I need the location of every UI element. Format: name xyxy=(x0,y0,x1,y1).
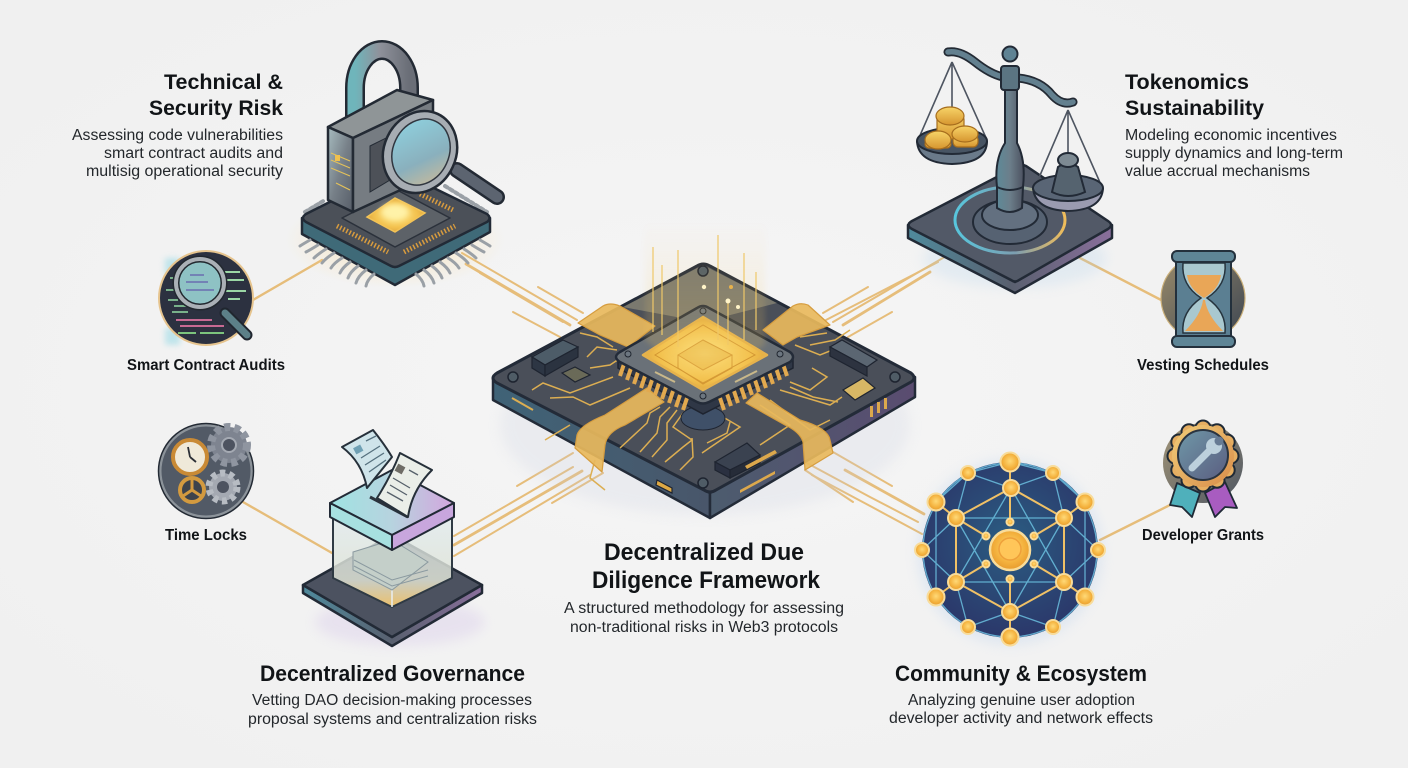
back ballot paper xyxy=(342,430,432,517)
code halo circle xyxy=(159,251,253,345)
caps xyxy=(1172,251,1235,347)
translucent back quadrant xyxy=(623,265,777,322)
central chip xyxy=(616,306,793,430)
magnifier lens xyxy=(381,109,461,195)
lower gear xyxy=(209,473,237,501)
heading: Technical & Security Risk: Security Risk xyxy=(149,96,283,120)
heading: Technical & Security Risk xyxy=(72,70,283,180)
sand xyxy=(1187,275,1221,298)
glowing ring xyxy=(955,187,1065,253)
icon: balance scale on platform xyxy=(908,46,1112,293)
heading: Tokenomics Sustainability: Sustainability xyxy=(1125,96,1264,120)
base top xyxy=(303,535,482,637)
chip pins xyxy=(300,186,490,286)
heading: Decentralized Governance: Decentralized Governance xyxy=(260,661,525,686)
heading: Decentralized Due Diligence Framework: Decentralized Due xyxy=(604,539,804,566)
heading: Technical & Security Risk: Technical & xyxy=(164,70,283,94)
icon: developer grants badge xyxy=(1163,420,1243,517)
heading: Community & Ecosystem: Community & Ecosystem xyxy=(895,661,1147,686)
grey gear xyxy=(211,427,247,463)
pivot block and knob xyxy=(1001,66,1019,90)
column xyxy=(996,75,1024,212)
rosette disc xyxy=(1172,425,1234,487)
heading: Tokenomics Sustainability: supply dynamics and long-term xyxy=(1125,145,1343,162)
board sides xyxy=(493,377,915,518)
network nodes xyxy=(915,452,1105,646)
inner die xyxy=(342,190,450,247)
front ballot paper xyxy=(377,453,432,517)
chip glow xyxy=(285,192,505,288)
label: Developer Grants: Developer Grants xyxy=(1142,527,1264,544)
ballot slot xyxy=(370,497,408,517)
board top xyxy=(493,264,914,492)
heading: Decentralized Due Diligence Framework xyxy=(564,539,844,636)
icon: hourglass xyxy=(1161,251,1245,347)
heading: Decentralized Due Diligence Framework: non-traditional risks in Web3 protocols xyxy=(570,619,838,636)
ribbons xyxy=(1170,483,1200,517)
right pan with weight xyxy=(1033,110,1103,211)
stepped plinth xyxy=(973,200,1047,244)
base top xyxy=(908,165,1111,282)
gold connector tabs xyxy=(575,304,833,472)
vertical light beams xyxy=(645,222,765,382)
central circuit board xyxy=(493,222,915,518)
board glow xyxy=(500,335,910,515)
halo circle xyxy=(1161,256,1245,340)
base glow xyxy=(923,228,1107,288)
heading: Decentralized Governance: proposal systems and centralization risks xyxy=(248,711,537,728)
chip pins xyxy=(620,364,787,410)
heading: Tokenomics Sustainability: Tokenomics xyxy=(1125,70,1249,94)
heading: Community & Ecosystem: Analyzing genuine user adoption xyxy=(908,692,1135,709)
magnifier handle xyxy=(225,313,247,335)
globe glow xyxy=(917,459,1103,645)
chip top xyxy=(616,306,793,404)
board traces xyxy=(512,330,850,490)
heading: Decentralized Governance: Vetting DAO decision-making processes xyxy=(252,692,532,709)
icon: smart contract audit magnifier xyxy=(159,251,253,345)
paper stack in box xyxy=(353,540,428,590)
transparent box xyxy=(333,517,452,607)
label: Smart Contract Audits: Smart Contract Audits xyxy=(127,357,285,374)
clock xyxy=(173,440,207,474)
label: Vesting Schedules: Vesting Schedules xyxy=(1137,357,1269,374)
heading: Technical & Security Risk: smart contract audits and xyxy=(104,145,283,162)
code lines xyxy=(166,272,246,333)
frame panel xyxy=(1176,258,1231,340)
coins xyxy=(925,107,978,149)
icon: network globe xyxy=(915,452,1105,646)
chip body xyxy=(681,406,725,430)
beam xyxy=(948,52,1073,103)
board screw holes xyxy=(508,266,900,488)
base side xyxy=(303,585,482,646)
magnifier handle xyxy=(457,170,497,197)
connector lines xyxy=(243,253,1170,556)
gold links xyxy=(936,462,1085,637)
label: Time Locks: Time Locks xyxy=(165,527,247,544)
chip gold core xyxy=(643,317,767,390)
rosette bumps xyxy=(1168,420,1238,492)
chip side xyxy=(302,218,490,285)
lock shackle xyxy=(355,50,409,128)
gold gear xyxy=(180,478,204,502)
icon: ballot box xyxy=(303,430,485,646)
die gold pins xyxy=(337,194,455,252)
heading: Technical & Security Risk: multisig operational security xyxy=(86,163,283,180)
halo circle xyxy=(1163,423,1243,503)
blue mesh xyxy=(922,462,1098,637)
lock body xyxy=(328,90,433,212)
hub node xyxy=(990,530,1030,570)
base side xyxy=(908,225,1112,293)
heading: Decentralized Due Diligence Framework: A structured methodology for assessing xyxy=(564,600,844,617)
chip top xyxy=(303,170,490,267)
globe xyxy=(922,462,1098,638)
lock circuit lines xyxy=(331,153,350,190)
heading: Decentralized Governance xyxy=(248,661,537,728)
heading: Community & Ecosystem: developer activity and network effects xyxy=(889,710,1153,727)
magnifier ring xyxy=(370,99,470,205)
heading: Community & Ecosystem xyxy=(889,661,1153,727)
dial circle xyxy=(160,425,252,517)
chip corner screws xyxy=(625,308,783,399)
glass xyxy=(1183,263,1225,333)
heading: Tokenomics Sustainability xyxy=(1125,70,1343,180)
icon: time lock gears xyxy=(158,424,254,518)
left pan with coins xyxy=(917,62,987,164)
heading: Tokenomics Sustainability: Modeling economic incentives xyxy=(1125,127,1337,144)
wrench xyxy=(1192,449,1211,468)
lens xyxy=(176,259,224,307)
heading: Tokenomics Sustainability: value accrual mechanisms xyxy=(1125,163,1310,180)
heading: Technical & Security Risk: Assessing code vulnerabilities xyxy=(72,127,283,144)
teal code glow xyxy=(165,258,180,345)
seal xyxy=(1178,430,1228,480)
lid xyxy=(330,470,454,550)
base glow xyxy=(315,598,485,646)
board ICs and components xyxy=(532,340,877,493)
icon: padlock on chip with magnifier xyxy=(285,50,505,288)
heading: Decentralized Due Diligence Framework: Diligence Framework xyxy=(592,567,820,594)
board side details xyxy=(740,398,887,493)
